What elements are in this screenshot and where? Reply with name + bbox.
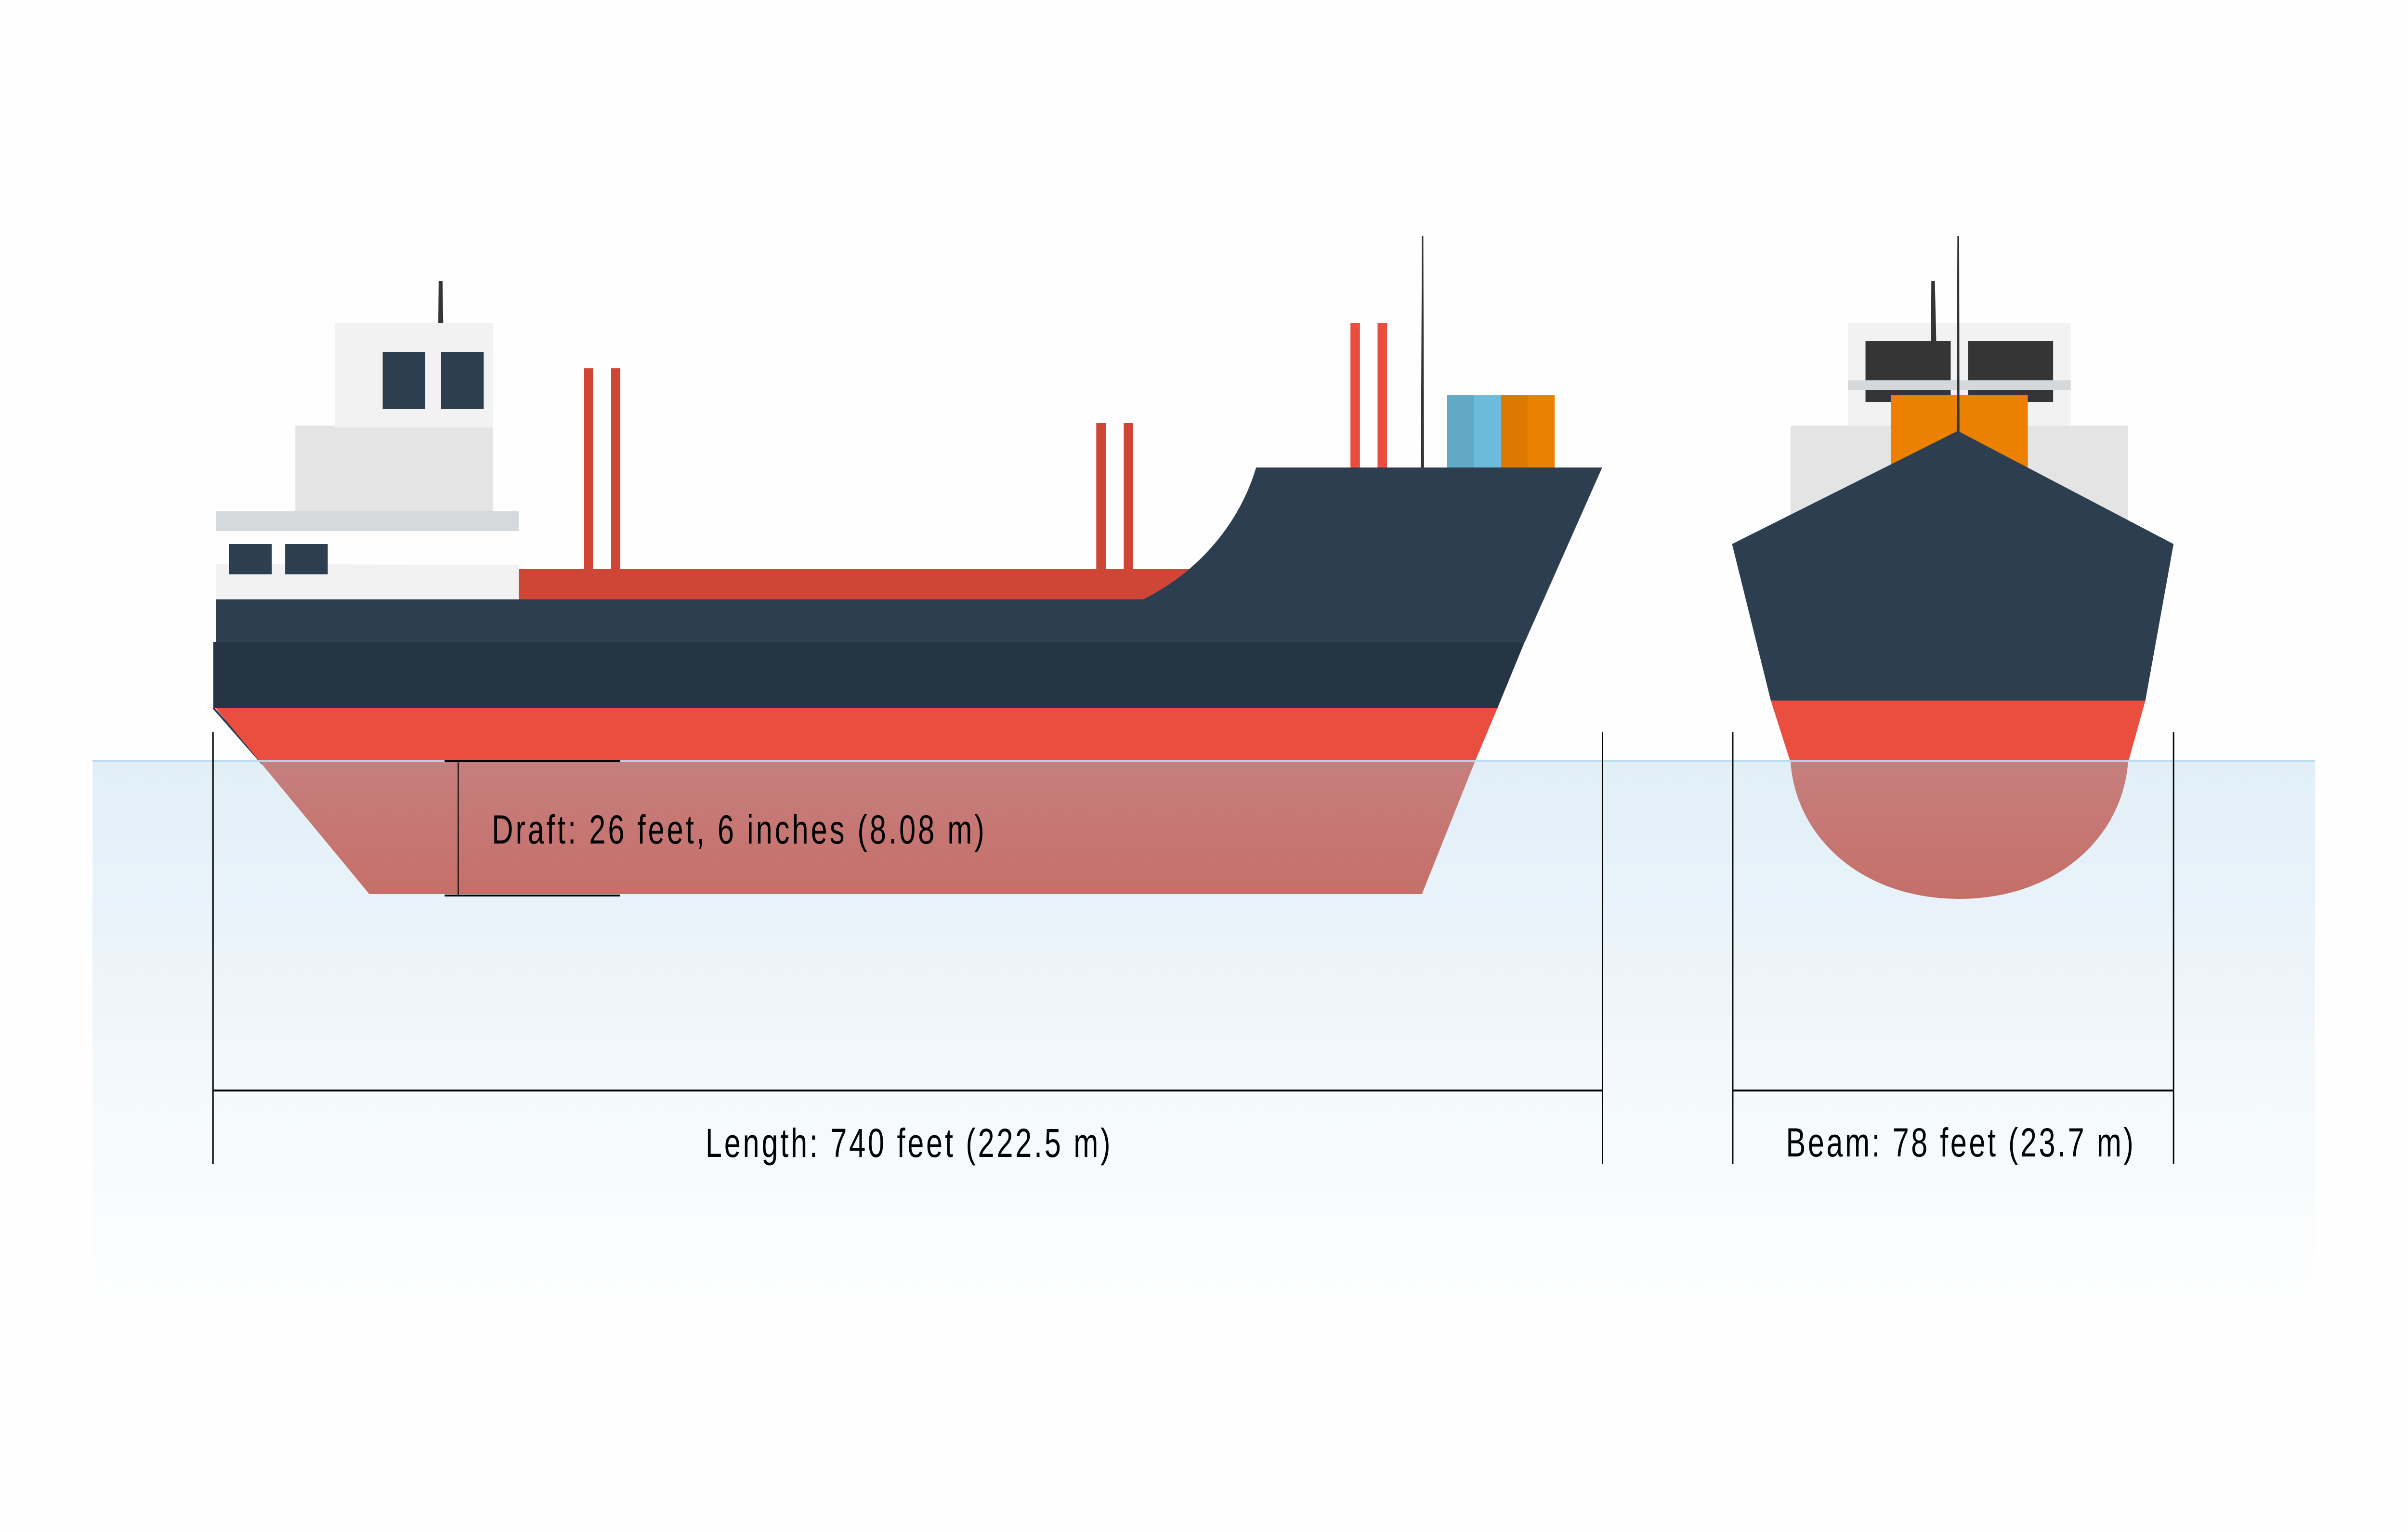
side view: mid superstructure xyxy=(295,426,493,511)
forward mast xyxy=(1421,236,1424,468)
lower cabin window right xyxy=(285,544,328,574)
front view: submerged hull xyxy=(1791,761,2128,899)
mid deck pipes xyxy=(1096,423,1133,571)
cargo containers xyxy=(1447,395,1555,468)
front view: mid superstructure xyxy=(1791,426,2128,522)
darker hull band xyxy=(213,642,1525,708)
front view: roof strip xyxy=(1848,380,2071,390)
front view: navy bow xyxy=(1732,431,2173,701)
length label: Length: 740 feet (222.5 m) xyxy=(706,1120,1111,1166)
length dimension xyxy=(212,732,1603,1166)
side view of the ship xyxy=(213,236,1602,894)
side view: roof strip xyxy=(216,511,519,531)
upper hull in navy xyxy=(216,467,1602,642)
front view: red hull band xyxy=(1771,701,2146,761)
front view: mast xyxy=(1957,236,1960,432)
water background xyxy=(92,760,2315,1314)
front view: antenna xyxy=(1931,281,1936,341)
draft dimension xyxy=(445,760,984,896)
front view: windows xyxy=(1866,341,2053,402)
red hull band above waterline xyxy=(215,708,1498,761)
waterline xyxy=(92,760,2315,762)
bridge window left xyxy=(383,352,425,409)
side view: rear antenna xyxy=(438,281,443,323)
front view: orange containers xyxy=(1891,395,2028,492)
side view: bridge cabin xyxy=(335,323,493,428)
front view: bridge cabin xyxy=(1848,323,2071,426)
side view: lower cabin base xyxy=(216,564,519,599)
front view of the ship xyxy=(1732,236,2173,899)
beam label: Beam: 78 feet (23.7 m) xyxy=(1786,1120,2133,1165)
red cargo deck xyxy=(519,569,1205,600)
draft label: Draft: 26 feet, 6 inches (8.08 m) xyxy=(492,807,984,852)
forward deck pipes xyxy=(1350,323,1387,468)
lower cabin window left xyxy=(229,544,272,574)
submerged hull xyxy=(260,761,1475,894)
bow edge line xyxy=(213,708,262,764)
beam dimension xyxy=(1732,732,2174,1165)
rear deck pipes xyxy=(584,368,620,571)
bridge window right xyxy=(441,352,484,409)
